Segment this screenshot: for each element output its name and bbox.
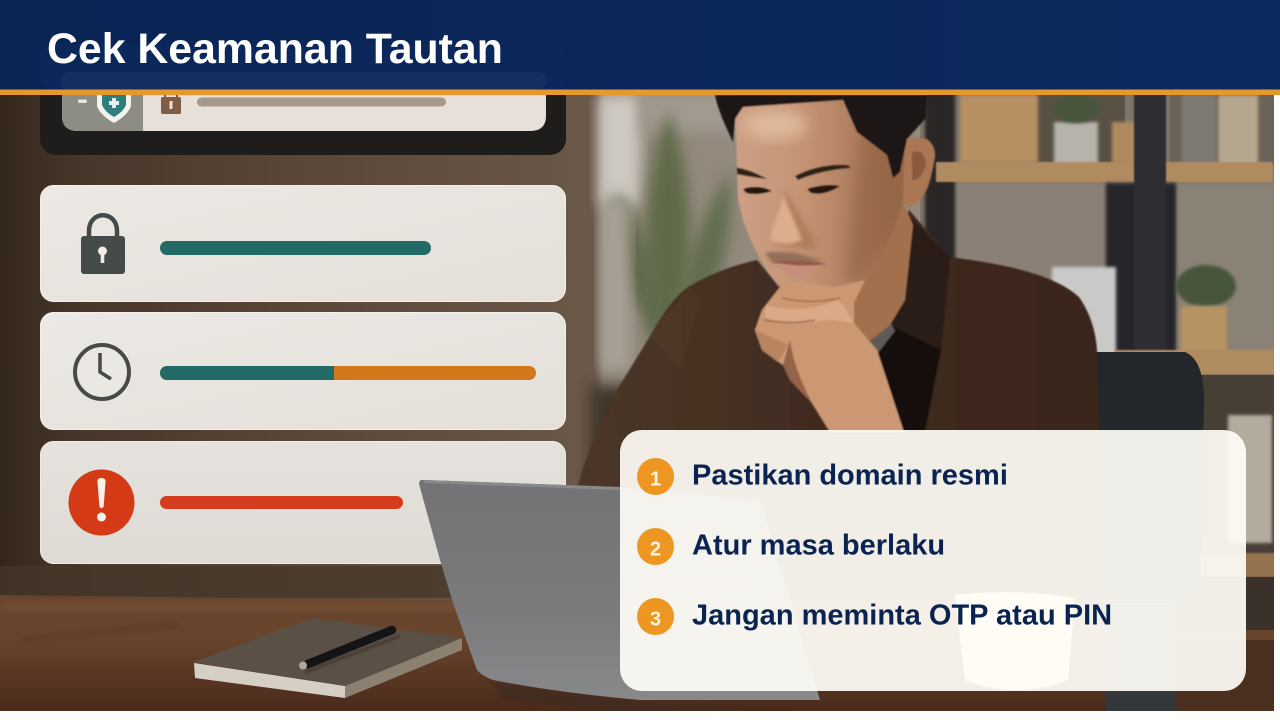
chair back	[1096, 352, 1204, 576]
man	[578, 95, 1100, 487]
hair	[715, 95, 927, 178]
laptop shadow	[493, 682, 790, 713]
pen	[308, 630, 392, 664]
moustache	[765, 252, 824, 263]
card: lock	[40, 186, 566, 302]
wall strip below cards	[0, 566, 470, 598]
tablet frame at top of card stack	[40, 95, 566, 155]
right-cheek shadow	[845, 135, 898, 281]
nose highlight	[771, 195, 802, 244]
icon: padlock	[81, 215, 125, 274]
desk surface	[0, 595, 1280, 713]
item 1: 1	[650, 468, 661, 490]
forehead highlight	[743, 110, 807, 140]
bar: teal and orange	[160, 366, 536, 380]
neck	[854, 202, 914, 342]
shirt torso and sleeves	[578, 210, 1100, 487]
face	[734, 98, 904, 287]
bar: teal	[160, 241, 431, 255]
right eye	[807, 185, 840, 194]
item 3: Jangan meminta OTP atau PIN	[692, 600, 1112, 632]
icon: clock	[75, 345, 129, 399]
upper lip	[772, 260, 827, 266]
notebook cover	[193, 618, 462, 686]
shelves on right wall	[920, 90, 1280, 637]
mug	[955, 592, 1075, 690]
tablet address card	[62, 95, 546, 131]
left eye	[743, 187, 772, 194]
notebook and pen	[193, 618, 462, 698]
icon: small padlock	[161, 94, 181, 114]
icon: alert	[68, 470, 134, 536]
placket	[878, 327, 941, 430]
item 3: 3	[650, 608, 661, 630]
hand on chin	[755, 280, 904, 432]
wall behind tablet cards	[0, 90, 600, 610]
left eyebrow	[735, 167, 767, 179]
lower lip	[781, 265, 820, 276]
icon: shield	[97, 94, 131, 123]
header accent line	[0, 90, 1280, 95]
ear	[900, 138, 935, 207]
address bar	[197, 98, 446, 106]
laptop	[419, 480, 820, 713]
item 2: 2	[650, 538, 661, 560]
item 1: Pastikan domain resmi	[692, 460, 1008, 492]
desk post	[1105, 691, 1175, 711]
shirt fold	[650, 288, 700, 370]
bar: red	[160, 496, 403, 509]
blurred plant backdrop	[584, 95, 920, 486]
item 2: Atur masa berlaku	[692, 530, 945, 562]
header bar	[0, 0, 1280, 95]
pen shadow	[305, 636, 400, 672]
title: Cek Keamanan Tautan	[47, 25, 503, 73]
collar flap	[892, 219, 950, 350]
notebook spine	[345, 638, 462, 698]
card: clock	[40, 312, 566, 430]
undershirt	[870, 323, 896, 353]
right eyebrow	[795, 165, 851, 180]
notebook pages	[194, 663, 345, 698]
nose shadow	[775, 190, 815, 250]
panel: checklist	[620, 430, 1246, 691]
card: alert	[40, 442, 566, 564]
